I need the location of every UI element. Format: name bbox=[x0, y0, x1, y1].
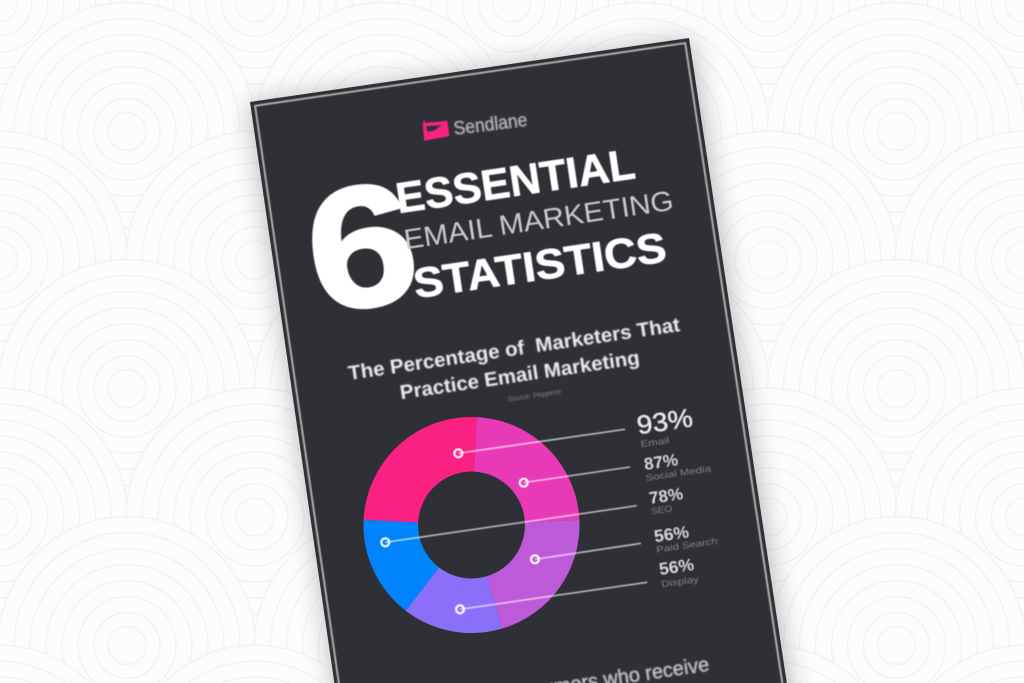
legend: display 56% bbox=[658, 555, 700, 589]
legend: social media 87%: Social Media bbox=[645, 463, 712, 483]
title line: statistics: STATISTICS bbox=[410, 223, 669, 307]
segment: social media bbox=[474, 417, 579, 522]
segment: paid search bbox=[487, 520, 580, 629]
panel: dark card bbox=[250, 38, 800, 683]
big number six: 6 bbox=[294, 144, 430, 350]
legend: paid search 56%: 56% bbox=[653, 522, 690, 546]
legend: paid search 56% bbox=[653, 522, 718, 555]
legend: email 93%: Email bbox=[640, 435, 670, 449]
title line: essential: ESSENTIAL bbox=[393, 140, 638, 223]
legend: social media 87% bbox=[643, 450, 712, 483]
segment: seo bbox=[363, 520, 439, 611]
legend: seo 78%: SEO bbox=[651, 503, 673, 516]
segment: display bbox=[406, 567, 502, 633]
segment: email bbox=[364, 417, 477, 522]
heading line one: The Percentage of Marketers That bbox=[347, 314, 682, 385]
legend bbox=[635, 402, 718, 589]
leader lines and markers bbox=[381, 429, 647, 613]
legend: display 56%: 56% bbox=[658, 555, 695, 579]
chart heading bbox=[347, 314, 682, 404]
source note: Source: Pepperie bbox=[507, 389, 562, 404]
title bbox=[294, 140, 675, 350]
donut chart bbox=[363, 417, 580, 633]
logo wordmark: Sendlane bbox=[453, 110, 529, 140]
title line: email marketing: EMAIL MARKETING bbox=[402, 185, 675, 255]
legend: seo 78%: 78% bbox=[648, 484, 684, 508]
legend: paid search 56%: Paid Search bbox=[656, 536, 718, 555]
legend: email 93%: 93% bbox=[635, 402, 695, 440]
logo icon bbox=[423, 120, 449, 141]
card shadow bbox=[250, 40, 802, 683]
legend: display 56%: Display bbox=[661, 574, 700, 589]
heading line two: Practice Email Marketing bbox=[399, 347, 641, 404]
legend: social media 87%: 87% bbox=[643, 450, 679, 474]
